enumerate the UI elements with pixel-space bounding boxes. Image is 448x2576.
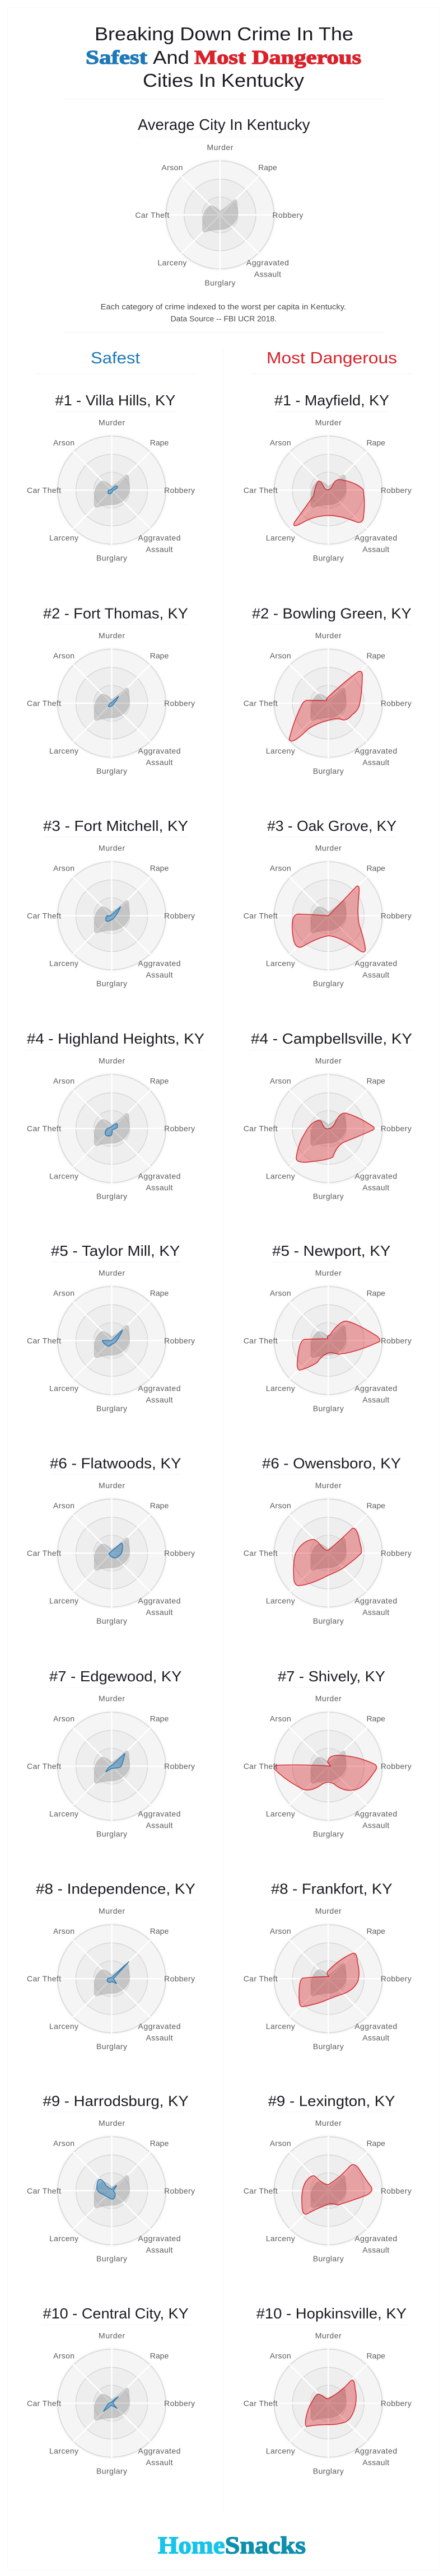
chart: Taylor Mill: Larceny: [49, 1383, 78, 1392]
title: Most Dangerous: [194, 46, 361, 68]
chart: Mayfield: Car Theft: [244, 485, 278, 494]
chart: Highland Heights: Arson: [53, 1077, 74, 1086]
heading: average city: Average City In Kentucky: [138, 116, 310, 133]
heading: #10 Central City: #10 - Central City, KY: [43, 2305, 189, 2322]
chart: Edgewood: Robbery: [164, 1762, 195, 1771]
chart: Independence: Assault: [146, 2033, 173, 2042]
chart: average city radar: Arson: [161, 163, 183, 172]
heading: #7 Edgewood: #7 - Edgewood, KY: [49, 1668, 181, 1685]
chart: Newport: Robbery: [381, 1336, 412, 1345]
title: Breaking Down Crime In The: [95, 24, 353, 44]
caption: methodology note: Each category of crime indexed to the worst per capita in Kentucky.: [101, 302, 346, 311]
chart: Taylor Mill: Robbery: [164, 1336, 195, 1345]
chart: Villa Hills: Car Theft: [27, 485, 61, 494]
chart: Oak Grove: Larceny: [266, 959, 295, 968]
chart: Frankfort: Aggravated: [354, 2022, 397, 2031]
chart: Highland Heights: [27, 1056, 195, 1201]
chart: Frankfort: Larceny: [266, 2022, 295, 2031]
chart: Edgewood: Car Theft: [27, 1762, 61, 1771]
chart: Mayfield: Aggravated: [354, 533, 397, 542]
chart: Campbellsville: Murder: [315, 1056, 342, 1065]
heading: #6 Owensboro: #6 - Owensboro, KY: [262, 1455, 401, 1471]
chart: Fort Mitchell: Larceny: [49, 959, 78, 968]
chart: Oak Grove: [244, 844, 412, 988]
chart: average city radar: Larceny: [157, 258, 186, 267]
chart: Campbellsville: Burglary: [313, 1192, 344, 1201]
chart: Villa Hills: Aggravated: [138, 533, 180, 542]
chart: Shively: Arson: [270, 1714, 291, 1723]
chart: Harrodsburg: Robbery: [164, 2186, 195, 2195]
chart: Owensboro: Assault: [362, 1607, 389, 1616]
chart: Owensboro: Larceny: [266, 1596, 295, 1605]
chart: Villa Hills: Murder: [99, 418, 125, 427]
chart: Fort Thomas: Aggravated: [138, 746, 180, 755]
chart: Central City: Aggravated: [138, 2446, 180, 2455]
heading: #5 Newport: #5 - Newport, KY: [272, 1242, 390, 1259]
chart: Shively: [244, 1694, 412, 1839]
chart: Central City: Car Theft: [27, 2399, 61, 2407]
chart: Hopkinsville: Murder: [315, 2331, 342, 2340]
chart: Fort Mitchell: Car Theft: [27, 911, 61, 920]
chart: Taylor Mill: Car Theft: [27, 1336, 61, 1345]
chart: Campbellsville: Aggravated: [354, 1172, 397, 1181]
chart: Harrodsburg: Larceny: [49, 2234, 78, 2243]
heading: #3 Oak Grove: #3 - Oak Grove, KY: [267, 817, 396, 834]
chart: Shively: Murder: [315, 1694, 342, 1703]
logo: HomeSnacks: Home: [158, 2533, 225, 2559]
chart: Fort Thomas: Robbery: [164, 699, 195, 708]
chart: Newport: Rape: [366, 1288, 385, 1297]
chart: Campbellsville: [244, 1056, 412, 1201]
heading: #8 Independence: #8 - Independence, KY: [36, 1881, 195, 1897]
chart: Villa Hills: Larceny: [49, 533, 78, 542]
chart: Highland Heights: Assault: [146, 1183, 173, 1192]
chart: Taylor Mill: Assault: [146, 1395, 173, 1404]
chart: Shively: Car Theft: [244, 1762, 278, 1771]
heading: #5 Taylor Mill: #5 - Taylor Mill, KY: [51, 1242, 180, 1259]
chart: Flatwoods: Larceny: [49, 1596, 78, 1605]
chart: Villa Hills: Assault: [146, 545, 173, 554]
chart: Independence: Arson: [53, 1927, 74, 1935]
chart: Shively: Aggravated: [354, 1810, 397, 1818]
chart: Highland Heights: Rape: [150, 1077, 169, 1086]
chart: Mayfield: Rape: [366, 438, 385, 447]
chart: Central City: Burglary: [96, 2466, 127, 2475]
chart: Highland Heights: Burglary: [96, 1192, 127, 1201]
chart: Bowling Green: Burglary: [313, 766, 344, 775]
chart: Flatwoods: Robbery: [164, 1549, 195, 1558]
chart: Bowling Green: Rape: [366, 651, 385, 660]
chart: Fort Thomas: Assault: [146, 758, 173, 767]
chart: Campbellsville: Assault: [362, 1183, 389, 1192]
chart: Frankfort: Rape: [366, 1927, 385, 1935]
chart: Bowling Green: Murder: [315, 631, 342, 640]
chart: Villa Hills: Arson: [53, 438, 74, 447]
chart: Highland Heights: Aggravated: [138, 1172, 180, 1181]
heading: #1 Mayfield: #1 - Mayfield, KY: [274, 392, 389, 409]
chart: Lexington: Rape: [366, 2139, 385, 2148]
chart: Mayfield: Larceny: [266, 533, 295, 542]
chart: Taylor Mill: Arson: [53, 1288, 74, 1297]
chart: Fort Thomas: Arson: [53, 651, 74, 660]
heading: #3 Fort Mitchell: #3 - Fort Mitchell, KY: [43, 817, 188, 834]
chart: Flatwoods: Aggravated: [138, 1596, 180, 1605]
chart: Campbellsville: Arson: [270, 1077, 291, 1086]
chart: Edgewood: Rape: [150, 1714, 169, 1723]
chart: Flatwoods: Car Theft: [27, 1549, 61, 1558]
chart: Bowling Green: Robbery: [381, 699, 412, 708]
chart: Taylor Mill: Aggravated: [138, 1383, 180, 1392]
chart: Central City: Rape: [150, 2351, 169, 2360]
column heading: most dangerous: Most Dangerous: [267, 349, 397, 367]
chart: average city radar: Murder: [207, 143, 234, 152]
chart: Mayfield: Burglary: [313, 553, 344, 562]
chart: Oak Grove: Aggravated: [354, 959, 397, 968]
title: Safest: [86, 46, 147, 68]
chart: Central City: Assault: [146, 2458, 173, 2467]
heading: #2 Fort Thomas: #2 - Fort Thomas, KY: [43, 605, 188, 621]
chart: Edgewood: Arson: [53, 1714, 74, 1723]
title: And: [153, 47, 189, 68]
chart: Villa Hills: Burglary: [96, 553, 127, 562]
chart: Owensboro: [244, 1481, 412, 1625]
chart: Harrodsburg: Aggravated: [138, 2234, 180, 2243]
heading: #9 Harrodsburg: #9 - Harrodsburg, KY: [43, 2092, 189, 2109]
chart: Shively: Assault: [362, 1821, 389, 1830]
chart: Central City: Larceny: [49, 2446, 78, 2455]
chart: Hopkinsville: Robbery: [381, 2399, 412, 2407]
title: Cities In Kentucky: [143, 70, 305, 91]
chart: Villa Hills: Rape: [150, 438, 169, 447]
chart: Frankfort: Murder: [315, 1906, 342, 1915]
chart: Independence: Aggravated: [138, 2022, 180, 2031]
chart: Campbellsville: Rape: [366, 1077, 385, 1086]
chart: Shively: Burglary: [313, 1830, 344, 1839]
chart: Fort Mitchell: Rape: [150, 864, 169, 873]
chart: Hopkinsville: Rape: [366, 2351, 385, 2360]
chart: average city radar: [135, 143, 303, 287]
chart: Flatwoods: Arson: [53, 1501, 74, 1510]
chart: Oak Grove: Arson: [270, 864, 291, 873]
chart: Edgewood: Aggravated: [138, 1810, 180, 1818]
chart: Highland Heights: Car Theft: [27, 1124, 61, 1133]
chart: Oak Grove: Rape: [366, 864, 385, 873]
chart: Flatwoods: Murder: [99, 1481, 125, 1490]
chart: Fort Mitchell: [27, 844, 195, 988]
heading: #2 Bowling Green: #2 - Bowling Green, KY: [252, 605, 412, 621]
chart: Central City: Murder: [99, 2331, 125, 2340]
chart: Hopkinsville: Assault: [362, 2458, 389, 2467]
chart: Frankfort: Arson: [270, 1927, 291, 1935]
chart: Independence: [27, 1906, 195, 2051]
caption: methodology note: [101, 302, 346, 323]
chart: Flatwoods: Burglary: [96, 1616, 127, 1625]
heading: #7 Shively: #7 - Shively, KY: [278, 1668, 385, 1685]
chart: Owensboro: Arson: [270, 1501, 291, 1510]
chart: Harrodsburg: [27, 2119, 195, 2263]
chart: Hopkinsville: Arson: [270, 2351, 291, 2360]
chart: Fort Thomas: Larceny: [49, 746, 78, 755]
chart: Lexington: Car Theft: [244, 2186, 278, 2195]
heading: #10 Hopkinsville: #10 - Hopkinsville, KY: [256, 2305, 407, 2322]
chart: Campbellsville: Larceny: [266, 1172, 295, 1181]
chart: Edgewood: [27, 1694, 195, 1839]
chart: Owensboro: Aggravated: [354, 1596, 397, 1605]
chart: Taylor Mill: Murder: [99, 1268, 125, 1277]
chart: Hopkinsville: Aggravated: [354, 2446, 397, 2455]
chart: Fort Mitchell: Robbery: [164, 911, 195, 920]
chart: Taylor Mill: Rape: [150, 1288, 169, 1297]
chart: Frankfort: [244, 1906, 412, 2051]
chart: Mayfield: [244, 418, 412, 562]
logo: HomeSnacks: Snacks: [225, 2533, 306, 2559]
chart: Newport: Car Theft: [244, 1336, 278, 1345]
chart: Newport: Burglary: [313, 1404, 344, 1413]
chart: Edgewood: Burglary: [96, 1830, 127, 1839]
chart: Owensboro: Murder: [315, 1481, 342, 1490]
chart: Bowling Green: Aggravated: [354, 746, 397, 755]
heading: #1 Villa Hills: #1 - Villa Hills, KY: [55, 392, 175, 409]
chart: average city radar: Rape: [258, 163, 277, 172]
chart: Lexington: Larceny: [266, 2234, 295, 2243]
chart: Highland Heights: Robbery: [164, 1124, 195, 1133]
chart: Fort Mitchell: Arson: [53, 864, 74, 873]
chart: Fort Mitchell: Aggravated: [138, 959, 180, 968]
chart: average city radar: Robbery: [272, 211, 303, 219]
chart: Newport: Assault: [362, 1395, 389, 1404]
chart: Harrodsburg: Murder: [99, 2119, 125, 2128]
chart: Shively: Rape: [366, 1714, 385, 1723]
chart: Lexington: Robbery: [381, 2186, 412, 2195]
chart: average city radar: Car Theft: [135, 211, 170, 219]
chart: Taylor Mill: [27, 1268, 195, 1413]
chart: Hopkinsville: Larceny: [266, 2446, 295, 2455]
chart: Fort Mitchell: Assault: [146, 970, 173, 979]
caption: methodology note: Data Source -- FBI UCR 2018.: [171, 315, 277, 323]
chart: Oak Grove: Burglary: [313, 979, 344, 988]
column heading: safest: Safest: [91, 349, 140, 367]
chart: Edgewood: Assault: [146, 1821, 173, 1830]
chart: Newport: Arson: [270, 1288, 291, 1297]
chart: Frankfort: Burglary: [313, 2042, 344, 2051]
chart: Highland Heights: Larceny: [49, 1172, 78, 1181]
chart: Independence: Murder: [99, 1906, 125, 1915]
chart: Bowling Green: Assault: [362, 758, 389, 767]
chart: Fort Thomas: Burglary: [96, 766, 127, 775]
chart: Flatwoods: Assault: [146, 1607, 173, 1616]
chart: Mayfield: Arson: [270, 438, 291, 447]
chart: Owensboro: Robbery: [381, 1549, 412, 1558]
logo: HomeSnacks: [158, 2533, 306, 2559]
chart: Harrodsburg: Rape: [150, 2139, 169, 2148]
chart: Fort Mitchell: Murder: [99, 844, 125, 853]
chart: Harrodsburg: Arson: [53, 2139, 74, 2148]
chart: Lexington: Burglary: [313, 2254, 344, 2263]
chart: Highland Heights: Murder: [99, 1056, 125, 1065]
chart: Harrodsburg: Car Theft: [27, 2186, 61, 2195]
chart: Central City: Arson: [53, 2351, 74, 2360]
chart: Mayfield: Murder: [315, 418, 342, 427]
chart: Hopkinsville: Burglary: [313, 2466, 344, 2475]
chart: Villa Hills: Robbery: [164, 485, 195, 494]
chart: Harrodsburg: Burglary: [96, 2254, 127, 2263]
chart: Flatwoods: Rape: [150, 1501, 169, 1510]
chart: Lexington: Murder: [315, 2119, 342, 2128]
chart: Oak Grove: Car Theft: [244, 911, 278, 920]
chart: Owensboro: Rape: [366, 1501, 385, 1510]
chart: Frankfort: Robbery: [381, 1974, 412, 1983]
heading: #9 Lexington: #9 - Lexington, KY: [268, 2092, 395, 2109]
chart: Frankfort: Assault: [362, 2033, 389, 2042]
chart: Lexington: Assault: [362, 2245, 389, 2254]
chart: Campbellsville: Robbery: [381, 1124, 412, 1133]
chart: Hopkinsville: [244, 2331, 412, 2475]
chart: Central City: [27, 2331, 195, 2475]
chart: average city radar: Assault: [254, 269, 281, 278]
heading: #4 Campbellsville: #4 - Campbellsville, KY: [251, 1030, 412, 1047]
chart: Owensboro: Car Theft: [244, 1549, 278, 1558]
chart: Lexington: Arson: [270, 2139, 291, 2148]
chart: Independence: Car Theft: [27, 1974, 61, 1983]
chart: Owensboro: Burglary: [313, 1616, 344, 1625]
chart: Bowling Green: Larceny: [266, 746, 295, 755]
chart: Frankfort: Car Theft: [244, 1974, 278, 1983]
chart: Fort Thomas: Rape: [150, 651, 169, 660]
chart: Shively: Larceny: [266, 1810, 295, 1818]
chart: Oak Grove: Murder: [315, 844, 342, 853]
chart: Independence: Rape: [150, 1927, 169, 1935]
chart: Lexington: Aggravated: [354, 2234, 397, 2243]
heading: #4 Highland Heights: #4 - Highland Heights, KY: [27, 1030, 204, 1047]
chart: Bowling Green: Arson: [270, 651, 291, 660]
heading: #6 Flatwoods: #6 - Flatwoods, KY: [50, 1455, 181, 1471]
chart: Edgewood: Murder: [99, 1694, 125, 1703]
chart: Shively: Robbery: [381, 1762, 412, 1771]
chart: Newport: [244, 1268, 412, 1413]
chart: Mayfield: Assault: [362, 545, 389, 554]
chart: Campbellsville: Car Theft: [244, 1124, 278, 1133]
chart: Taylor Mill: Burglary: [96, 1404, 127, 1413]
chart: Harrodsburg: Assault: [146, 2245, 173, 2254]
chart: Oak Grove: Assault: [362, 970, 389, 979]
chart: Oak Grove: Robbery: [381, 911, 412, 920]
chart: Fort Thomas: [27, 631, 195, 775]
chart: Flatwoods: [27, 1481, 195, 1625]
chart: Central City: Robbery: [164, 2399, 195, 2407]
chart: Independence: Burglary: [96, 2042, 127, 2051]
chart: Villa Hills: [27, 418, 195, 562]
chart: Fort Thomas: Car Theft: [27, 699, 61, 708]
chart: Fort Mitchell: Burglary: [96, 979, 127, 988]
chart: Bowling Green: Car Theft: [244, 699, 278, 708]
chart: Newport: Larceny: [266, 1383, 295, 1392]
chart: average city radar: Aggravated: [246, 258, 289, 267]
heading: #8 Frankfort: #8 - Frankfort, KY: [271, 1881, 392, 1897]
chart: Lexington: [244, 2119, 412, 2263]
chart: Independence: Larceny: [49, 2022, 78, 2031]
chart: Edgewood: Larceny: [49, 1810, 78, 1818]
chart: Mayfield: Robbery: [381, 485, 412, 494]
chart: Independence: Robbery: [164, 1974, 195, 1983]
chart: Hopkinsville: Car Theft: [244, 2399, 278, 2407]
chart: Fort Thomas: Murder: [99, 631, 125, 640]
chart: Newport: Aggravated: [354, 1383, 397, 1392]
chart: Bowling Green: [244, 631, 412, 775]
chart: Newport: Murder: [315, 1268, 342, 1277]
chart: average city radar: Burglary: [204, 278, 235, 287]
title: [86, 24, 361, 91]
